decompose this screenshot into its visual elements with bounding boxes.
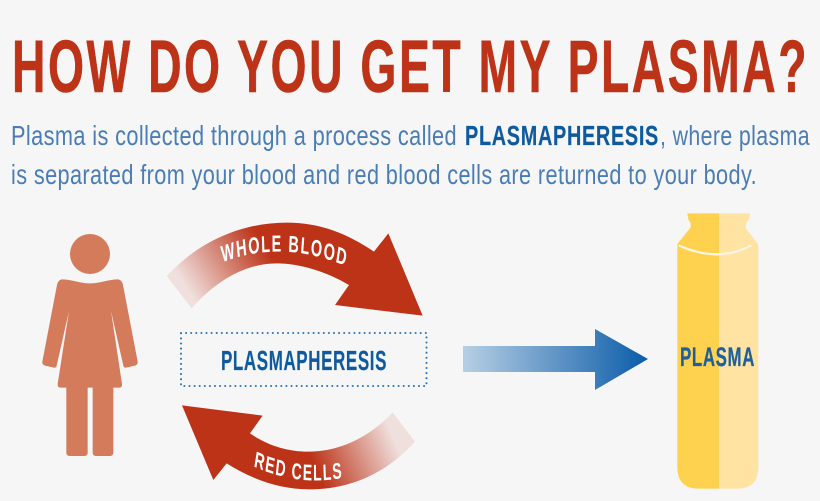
bottle label: PLASMA bbox=[680, 342, 755, 372]
whole blood label: WHOLE BLOOD bbox=[220, 236, 346, 264]
person body bbox=[42, 279, 138, 456]
whole blood arrow shape bbox=[167, 223, 423, 316]
intro keyword: PLASMAPHERESIS bbox=[465, 120, 659, 151]
icon: person bbox=[42, 234, 138, 456]
bottle liquid line bbox=[679, 245, 751, 254]
arrow: red cells bbox=[182, 405, 415, 490]
person head bbox=[70, 234, 110, 274]
intro text bbox=[11, 120, 810, 190]
bottle right half bbox=[719, 213, 758, 489]
bottle left half bbox=[677, 213, 719, 489]
red cells arrow shape bbox=[182, 405, 415, 489]
plasmapheresis box bbox=[181, 333, 426, 386]
arrow: blue to plasma bbox=[463, 329, 648, 390]
box label: PLASMAPHERESIS bbox=[221, 345, 387, 376]
red cells label: RED CELLS bbox=[254, 452, 342, 480]
arrow: whole blood bbox=[167, 222, 423, 316]
intro line 1: Plasma is collected through a process called bbox=[11, 120, 457, 151]
bottle shape bbox=[677, 213, 758, 489]
dotted frame bbox=[181, 333, 426, 386]
icon: plasma bottle bbox=[677, 213, 758, 489]
